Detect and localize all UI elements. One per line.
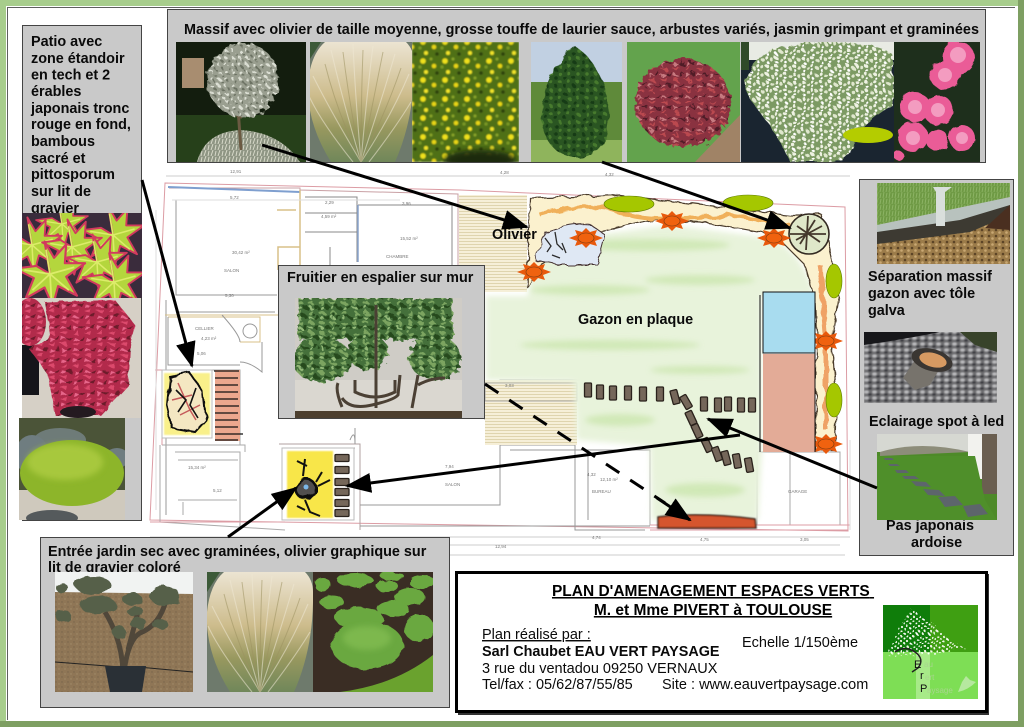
plan: dimension labels: 5,30 [225, 293, 234, 298]
text: entry garden description: Entrée jardin sec avec graminées, olivier graphique sur [48, 544, 427, 560]
plan: dimension labels: 15,34 m² [188, 465, 206, 470]
title: M. et Mme PIVERT à TOULOUSE [594, 602, 832, 619]
logo: r [920, 670, 924, 682]
logo: aysage [927, 686, 953, 695]
panel: entry garden [40, 538, 450, 708]
photo: led spot [864, 332, 997, 403]
arrow: entry panel to entry tree [228, 488, 296, 537]
plan: stepping stones [584, 383, 756, 473]
plan: dimension labels: 12,91 [230, 169, 242, 174]
plan: lawn colour strokes [520, 239, 755, 497]
text: separation: galva [868, 303, 906, 319]
plan: dimension labels: 3,03 [505, 383, 514, 388]
company details: Plan réalisé par : [482, 627, 591, 643]
plan: corner tree [789, 214, 829, 254]
text: patio description: Patio avec [31, 34, 102, 50]
plan: lime bushes [604, 195, 842, 417]
text: patio description: pittosporum [31, 167, 115, 183]
label: Olivier: Olivier [492, 227, 537, 243]
plan: dimension labels: 7,94 [445, 464, 454, 469]
photo: red nandina [14, 298, 141, 418]
logo [883, 605, 978, 699]
plan: dimension labels: GARAGE [788, 489, 807, 494]
arrow: stones to entry stones [347, 435, 740, 486]
title: PLAN D'AMENAGEMENT ESPACES VERTS [552, 583, 870, 600]
photo: pittosporum ball [19, 418, 125, 520]
text: lighting: Eclairage spot à led [869, 414, 1004, 430]
plan: lawn [486, 225, 813, 520]
panel: top massif [168, 10, 986, 170]
plan: dimension labels: BUREAU [592, 489, 611, 494]
logo: P [920, 683, 927, 695]
photo: jasmine [741, 42, 894, 162]
plan: dimension labels: 12,94 [495, 544, 507, 549]
plan: dimension labels: 4,28 [500, 170, 509, 175]
text: patio description: en tech et 2 [31, 68, 110, 84]
plan: entry dry garden [282, 448, 354, 520]
photo: olive tree [176, 42, 306, 162]
plan: dimension labels: 12,10 m² [600, 477, 618, 482]
garden plan drawing [150, 169, 850, 555]
plan: dimension labels [188, 169, 809, 549]
plan: dimension labels: 5,72 [230, 195, 239, 200]
heading: espalier: Fruitier en espalier sur mur [287, 270, 474, 286]
plan: planting bed along the fence [527, 195, 838, 450]
logo: au [924, 660, 933, 669]
heading: massif: Massif avec olivier de taille moyenne, grosse touffe de laurier sauce, arbustes variés, jasmin grimpant et graminées [184, 22, 979, 38]
company details: Site : www.eauvertpaysage.com [662, 677, 868, 693]
text: patio description: zone étandoir [31, 51, 125, 67]
text: patio description: rouge en fond, [31, 117, 131, 133]
plan: red bed at the end of the garden [658, 515, 756, 528]
panel: right side [860, 180, 1014, 556]
arrow: top panel to corner tree [602, 162, 790, 228]
scale: Echelle 1/150ème [742, 635, 858, 651]
plan: olive tree scribble [545, 232, 566, 258]
text: patio description: bambous [31, 134, 95, 150]
plan: orange shrubs [517, 211, 843, 454]
photo: cypress [531, 42, 622, 162]
plan: dimension labels: 15,52 m² [400, 236, 418, 241]
logo: E [914, 659, 921, 671]
photo: grasses on gravel [313, 572, 435, 692]
text: separation: Séparation massif [868, 269, 992, 285]
plan: dimension labels: 4,59 m² [321, 214, 337, 219]
text: patio description: gravier [31, 201, 79, 217]
plan: dimension labels: 4,32 [605, 172, 614, 177]
photo: metal edging [877, 183, 1010, 264]
text: patio description: sacré et [31, 151, 86, 167]
company details: 3 rue du ventadou 09250 VERNAUX [482, 661, 718, 677]
jasmine lime bush marker [843, 127, 893, 143]
photo: stipa grass [308, 42, 414, 162]
panel: espalier [278, 266, 484, 418]
panel: patio [19, 25, 142, 521]
plan: dimension labels: SALON [224, 268, 239, 273]
photo: japanese maple [22, 213, 142, 298]
plan: dimension labels: 4,32 [587, 472, 596, 477]
photo: espalier tree [292, 298, 462, 418]
plan: dimension labels: SALON [445, 482, 460, 487]
text: stepping stones: Pas japonais [886, 518, 974, 534]
plan: dimension labels: 3,96 [402, 201, 411, 206]
plan: patio [162, 370, 243, 441]
plan: dimension labels: 2,29 [325, 200, 334, 205]
arrow: patio panel to patio [142, 180, 192, 366]
text: patio description: japonais tronc [30, 101, 129, 117]
arrow: dashed espalier to wall [485, 384, 690, 520]
text: entry garden description: lit de gravier coloré [48, 560, 181, 576]
plan: dimension labels: 4,75 [700, 537, 709, 542]
plan: dimension labels: 5,06 [197, 351, 206, 356]
plan: dimension labels: CELLIER [195, 326, 215, 331]
text: separation: gazon avec tôle [868, 286, 975, 302]
photo: graphic olive tree [55, 572, 193, 692]
company details: Sarl Chaubet EAU VERT PAYSAGE [482, 644, 720, 660]
plan: house walls and dimensions [150, 176, 850, 555]
arrow: stepping stone panel to stones [708, 419, 877, 488]
arrow: top panel to olive tree [262, 145, 527, 227]
plan: dimension labels: 4,23 m² [201, 336, 217, 341]
text: patio description: érables [31, 84, 81, 100]
logo: ert [925, 673, 935, 682]
plan: dimension labels: 30,42 m² [232, 250, 250, 255]
photo: pink camellia [894, 41, 980, 162]
company details: Tel/fax : 05/62/87/55/85 [482, 677, 633, 693]
photo: yellow shrub [412, 42, 519, 170]
plan: wooden decks [459, 195, 577, 445]
company details [482, 627, 868, 693]
plan: pool and terrace [760, 292, 815, 452]
plan: dimension labels: 5,12 [213, 488, 222, 493]
text: stepping stones: ardoise [911, 535, 962, 551]
photo: stipa [207, 572, 313, 692]
label: Gazon en plaque: Gazon en plaque [578, 312, 693, 328]
photo: red photinia [627, 42, 740, 162]
text: patio description: sur lit de [31, 184, 91, 200]
title block [456, 572, 989, 715]
plan: dimension labels: CHAMBRE [386, 254, 409, 259]
photo: stepping stones on lawn [877, 434, 997, 520]
plan: dimension labels: 3,05 [800, 537, 809, 542]
plan: dimension labels: 4,74 [592, 535, 601, 540]
